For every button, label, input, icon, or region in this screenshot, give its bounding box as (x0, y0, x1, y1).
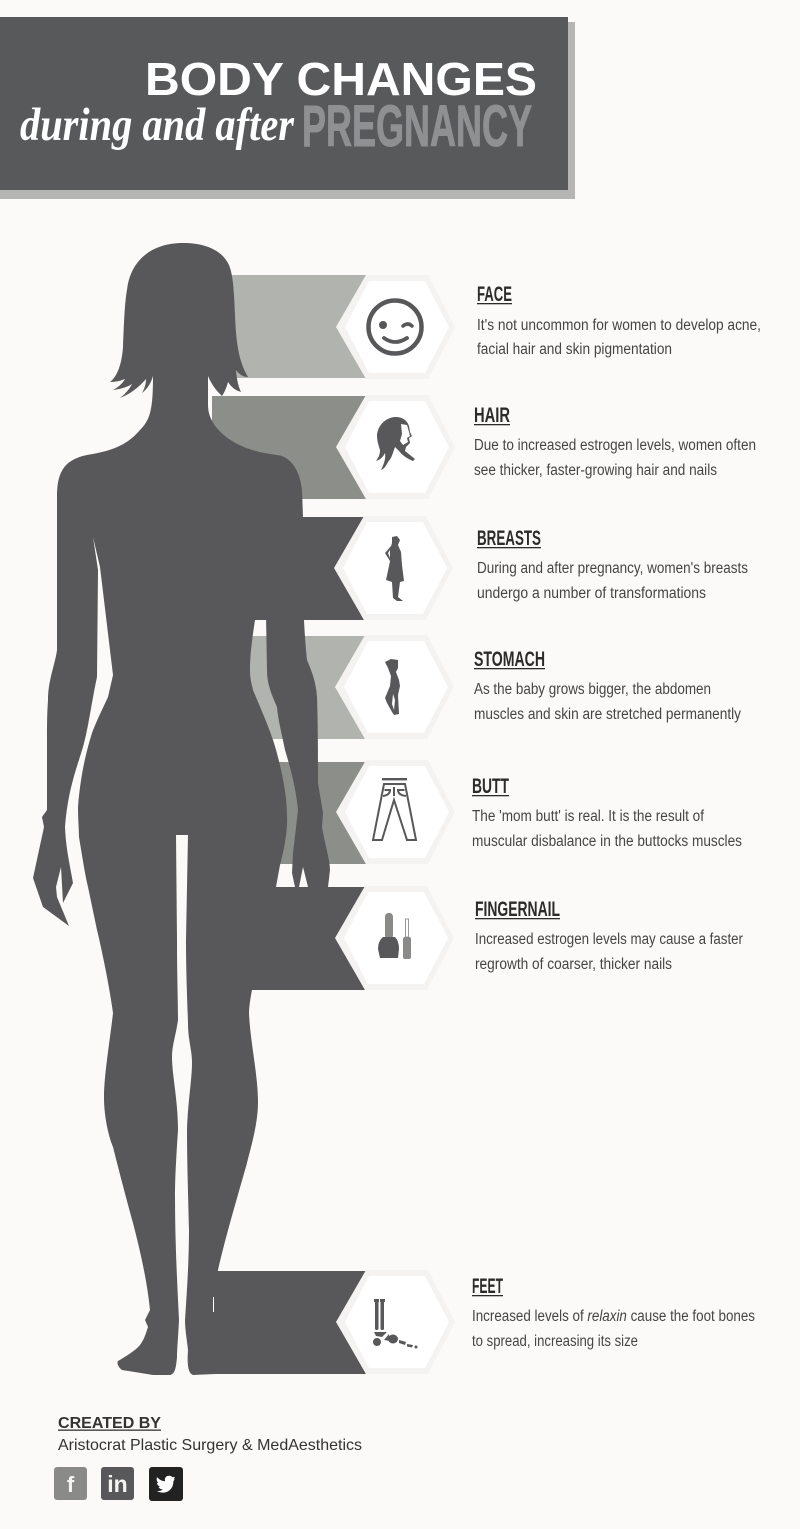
text block: butt: The 'mom butt' is real. It is the result of (472, 808, 705, 825)
text block: feet: Increased levels of relaxin cause the foot bones (472, 1308, 755, 1325)
woman silhouette (33, 243, 330, 1375)
text block: breasts: During and after pregnancy, women's breasts (477, 560, 748, 577)
icon: trousers (373, 778, 416, 840)
hexagon: face (336, 275, 455, 379)
icon: hair profile (376, 417, 415, 470)
text block: hair (474, 404, 756, 479)
icon: facebook (54, 1467, 87, 1500)
footer credit: CREATED BY (58, 1415, 161, 1432)
callout bars (212, 275, 366, 1374)
text block: butt: muscular disbalance in the buttocks muscles (472, 833, 742, 850)
hexagon: stomach (335, 635, 454, 739)
text block: hair: see thicker, faster-growing hair and nails (474, 462, 717, 479)
text block: hair: Due to increased estrogen levels, women often (474, 437, 756, 454)
header banner (0, 17, 575, 199)
text block: stomach: muscles and skin are stretched permanently (474, 706, 741, 723)
icon: linkedin (101, 1467, 134, 1500)
text block: face: It's not uncommon for women to develop acne, (477, 317, 761, 334)
hexagons (334, 275, 455, 1374)
hexagon: feet (336, 1270, 455, 1374)
text block: butt: BUTT (472, 775, 509, 798)
subtitle: during and after: during and after (20, 99, 295, 151)
text block: stomach: As the baby grows bigger, the abdomen (474, 681, 711, 698)
footer credit: Aristocrat Plastic Surgery & MedAesthetics (58, 1437, 362, 1454)
text block: breasts: BREASTS (477, 527, 541, 550)
text block: stomach: STOMACH (474, 648, 545, 671)
text block: fingernail: regrowth of coarser, thicker nails (475, 956, 672, 973)
text block: fingernail (475, 898, 743, 973)
text block: fingernail: Increased estrogen levels may cause a faster (475, 931, 743, 948)
title: pregnancy: PREGNANCY (302, 94, 532, 159)
text block: stomach (474, 648, 741, 723)
hexagon: butt (336, 760, 455, 864)
text block: face: facial hair and skin pigmentation (477, 341, 672, 358)
icon: facebook: f (67, 1472, 75, 1497)
icon: twitter (149, 1467, 183, 1501)
hexagon: hair (336, 395, 455, 499)
text block: face (477, 283, 761, 358)
footer credit (58, 1415, 362, 1454)
text block: feet (472, 1275, 755, 1350)
text block: feet: to spread, increasing its size (472, 1333, 638, 1350)
icon: foot bones (373, 1299, 418, 1348)
icon: winking face (368, 300, 422, 354)
hexagon: breasts (334, 516, 453, 620)
icon: linkedin: in (107, 1471, 128, 1497)
text block: breasts: undergo a number of transformations (477, 585, 706, 602)
text block: face: FACE (477, 283, 512, 306)
text block: hair: HAIR (474, 404, 510, 427)
hexagon: fingernail (335, 886, 454, 990)
text block: feet: FEET (472, 1275, 503, 1298)
text block: breasts (477, 527, 748, 602)
icon: woman in dress (385, 536, 404, 601)
title: body changes: BODY CHANGES (145, 53, 537, 105)
icon: nail polish (378, 913, 411, 959)
text block: fingernail: FINGERNAIL (475, 898, 560, 921)
text block: butt (472, 775, 742, 850)
icon: posing woman (385, 659, 400, 715)
